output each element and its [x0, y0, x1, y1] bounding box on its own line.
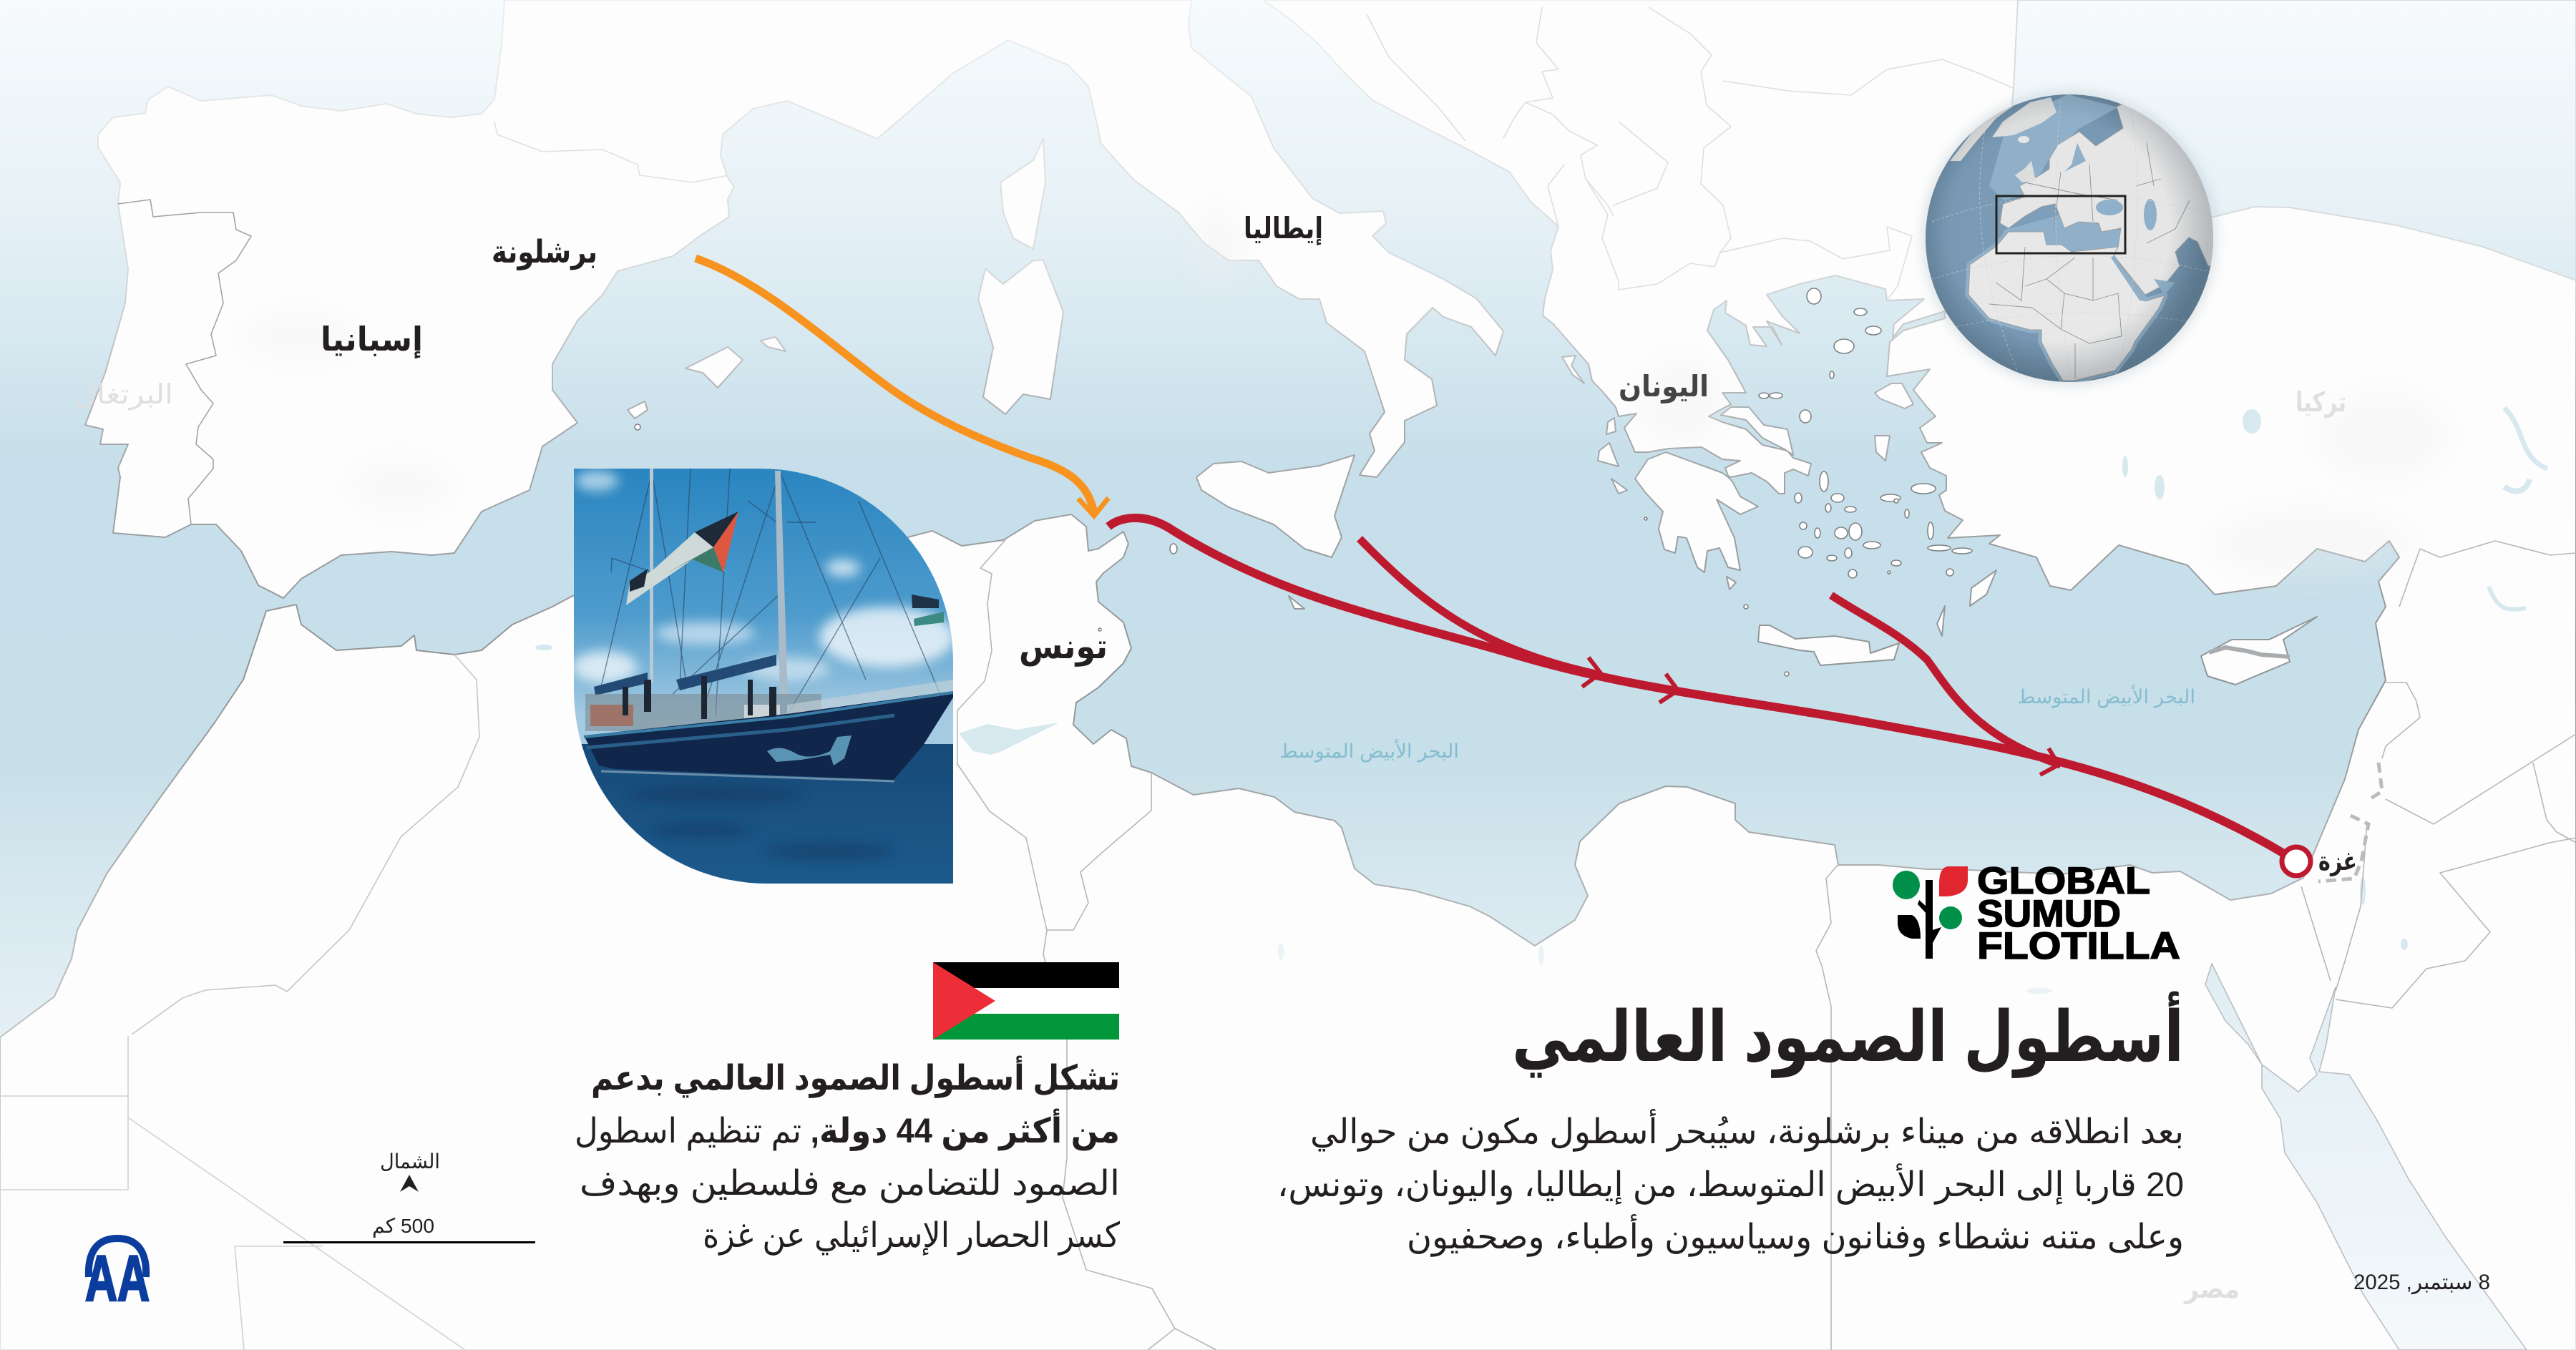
land: Malta: [1289, 596, 1304, 609]
logo wordmark: SUMUD: [1977, 893, 2121, 935]
logo wordmark: [1977, 860, 2180, 967]
label: Tunisia: تونس: [1019, 628, 1108, 667]
text block: route description: [1277, 1109, 2184, 1257]
land: Corfu: [1562, 356, 1584, 383]
photo hull painting: [767, 735, 852, 766]
text block: route description: 20 قاربا إلى البحر الأبيض المتوسط، من إيطاليا، واليونان، وتونس،: [1277, 1163, 2184, 1205]
title: أسطول الصمود العالمي: [1512, 991, 2184, 1078]
land: Menorca: [761, 337, 786, 351]
scale bar: [283, 1215, 535, 1243]
logo wordmark: GLOBAL: [1977, 860, 2150, 902]
land: Cephalonia: [1598, 443, 1619, 466]
globe map: [1932, 93, 2225, 381]
land: Corsica: [1000, 139, 1045, 249]
land: Sicily: [1196, 455, 1355, 557]
date: 8 سبتمبر, 2025: [2353, 1271, 2490, 1294]
logo icon: [1893, 866, 1968, 959]
north indicator: الشمال: [380, 1150, 440, 1173]
marker: Gaza: [2282, 847, 2311, 876]
photo sails furled: [594, 655, 776, 695]
sea: Black Sea: [2012, 0, 2576, 280]
land: Mallorca: [686, 347, 743, 388]
globe inset frame: [1996, 196, 2125, 253]
land: Peloponnese: [1635, 452, 1758, 572]
text block: route description: بعد انطلاقه من ميناء برشلونة، سيُبحر أسطول مكون من حوالي: [1310, 1109, 2184, 1152]
country labels: [74, 212, 2357, 1304]
faint relief shading on land: [243, 207, 2447, 579]
photo water ripples: [630, 784, 894, 860]
land: Crete: [1758, 625, 1899, 665]
text block: fleet support: [575, 1055, 1120, 1256]
lakes and reservoirs: [535, 408, 2547, 994]
border: contested dashed line: [2318, 763, 2382, 881]
land: Lesbos: [1875, 383, 1913, 409]
route: Barcelona to Tunisia: [696, 258, 1108, 516]
land: Cyprus: [2201, 617, 2317, 685]
label: Greece: اليونان: [1619, 370, 1709, 403]
arrowhead: second: [1659, 674, 1678, 703]
land: Kythira: [1727, 577, 1736, 590]
label: Portugal: البرتغال: [74, 380, 173, 411]
text block: fleet support: من أكثر من 44 دولة, تم تنظيم اسطول: [575, 1108, 1120, 1151]
sea labels: [1279, 684, 2195, 763]
text block: fleet support: تشكل أسطول الصمود العالمي بدعم: [591, 1055, 1120, 1098]
label: Barcelona: برشلونة: [492, 235, 597, 270]
text block: fleet support: كسر الحصار الإسرائيلي عن غزة: [703, 1217, 1120, 1256]
photo small flags: [912, 595, 939, 608]
land: Lefkada: [1606, 418, 1616, 434]
photo deck crowd: [585, 676, 953, 731]
label: Gaza: غزة: [2318, 846, 2357, 876]
photo hull stripe: [584, 693, 953, 737]
photo masts and rigging: [601, 469, 946, 715]
text block: fleet support: الصمود للتضامن مع فلسطين وبهدف: [580, 1165, 1120, 1203]
small islands: [635, 288, 1972, 676]
photo mast 1: [650, 469, 653, 683]
land: Sardinia: [978, 260, 1063, 414]
scale bar: 500 كم: [372, 1215, 434, 1238]
land: Ibiza: [628, 401, 648, 419]
land: France, Iberia and Italy: [85, 0, 1503, 598]
arrowhead: first: [1582, 657, 1601, 687]
routes: flotilla to Gaza: [1108, 518, 2286, 855]
label: Egypt: مصر: [2183, 1274, 2240, 1304]
logo: Anadolu Agency: AA: [85, 1243, 150, 1315]
land: Chios: [1875, 436, 1890, 461]
land: Zakynthos: [1611, 479, 1627, 494]
photo: sailboat with Palestinian flag: [572, 469, 955, 884]
label: Mediterranean Sea west: البحر الأبيض المتوسط: [1279, 738, 1459, 763]
border: Cyprus buffer zone: [2209, 647, 2290, 657]
photo mast 2: [775, 471, 788, 698]
photo sky: [574, 469, 953, 755]
land: Karpathos: [1937, 606, 1945, 636]
globe edge shading: [1926, 94, 2213, 382]
photo water: [574, 744, 953, 884]
locator globe: [1922, 91, 2225, 386]
logo: Anadolu Agency: [85, 1238, 150, 1315]
arrowhead: third: [2040, 748, 2059, 775]
photo clouds: [572, 471, 955, 683]
globe sphere: [1926, 94, 2213, 382]
label: Italy: إيطاليا: [1244, 212, 1323, 246]
logo: Global Sumud Flotilla: [1893, 860, 2180, 967]
sea: Red Sea and gulfs: [2205, 964, 2527, 1350]
route: Tunisia to Gaza: [1108, 518, 2286, 855]
photo waterline: [601, 771, 894, 781]
arrowhead: orange: [1078, 498, 1108, 516]
north indicator: [380, 1150, 440, 1192]
flag: Palestine: [933, 962, 1119, 1040]
label: Turkey: تركيا: [2296, 388, 2346, 418]
land: Euboea: [1721, 407, 1793, 455]
route: Greece branch: [1831, 595, 2061, 765]
globe shadow: [1922, 91, 2217, 386]
route: Italy branch: [1360, 539, 1596, 674]
label: Mediterranean Sea east: البحر الأبيض المتوسط: [2017, 684, 2195, 708]
photo hull: [584, 691, 953, 780]
land: Rhodes: [1970, 570, 1996, 606]
logo wordmark: FLOTILLA: [1977, 925, 2180, 967]
photo waving flag: [626, 512, 738, 605]
label: Spain: إسبانيا: [321, 321, 423, 359]
text block: route description: وعلى متنه نشطاء وفنانون وسياسيون وأطباء، وصحفيون: [1407, 1214, 2184, 1257]
